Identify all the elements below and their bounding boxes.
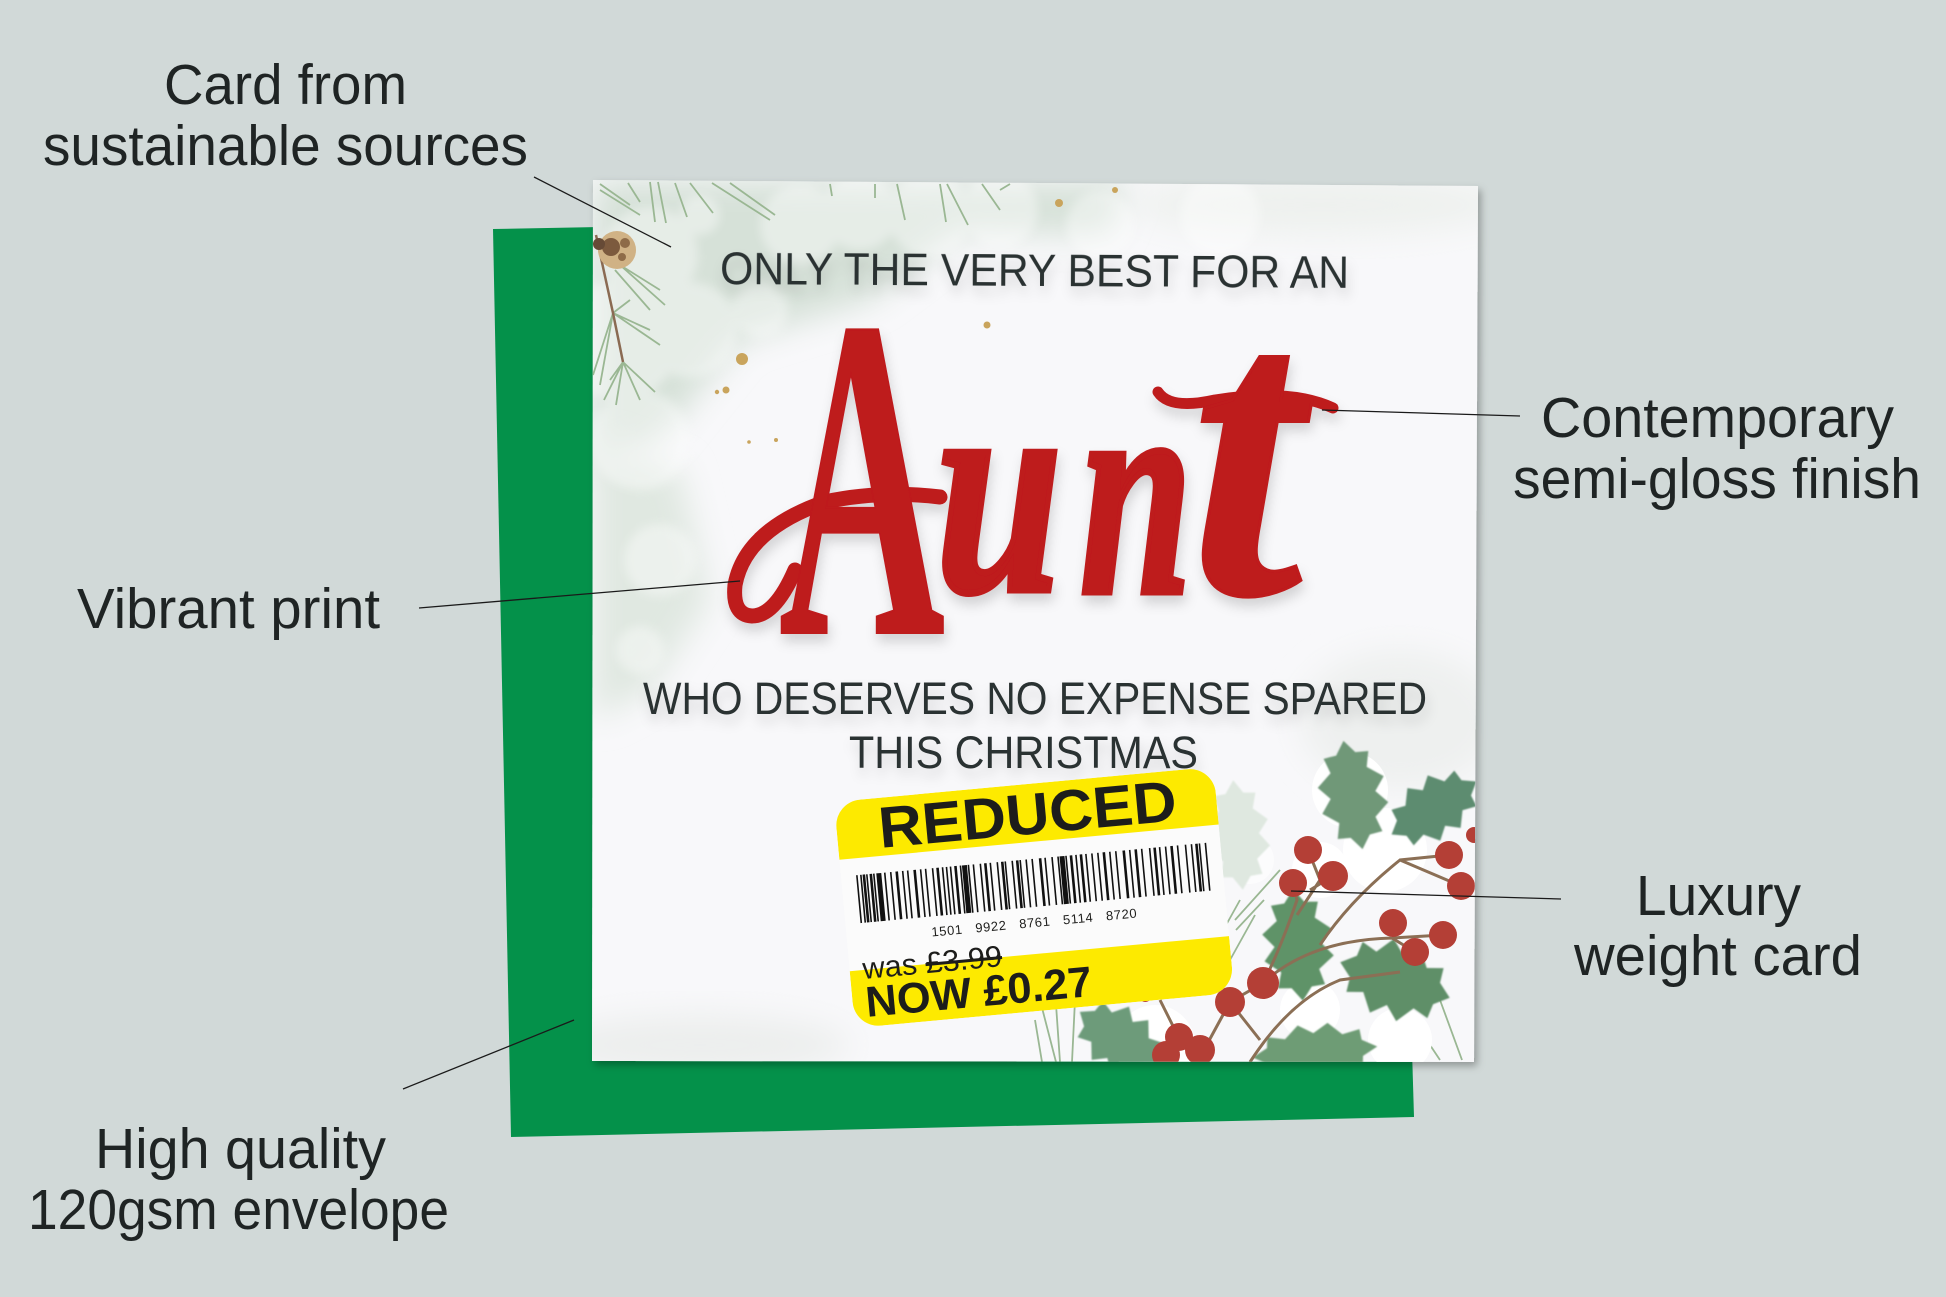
label: luxury weight card: Luxury <box>1636 864 1801 928</box>
card greeting: lower lines <box>643 673 1427 778</box>
label: sustainable sources: sustainable sources <box>43 114 528 178</box>
new price: NOW £0.27 <box>863 958 1094 1027</box>
pine cone and branch <box>593 231 636 362</box>
label: sustainable sources <box>43 53 528 178</box>
word: Aunt: t <box>1190 219 1316 684</box>
label: semi-gloss finish: semi-gloss finish <box>1513 447 1921 511</box>
card watercolour artwork <box>592 180 1478 1062</box>
envelope <box>493 227 1414 1137</box>
gold specks <box>715 187 1118 444</box>
barcode <box>857 843 1210 923</box>
white cloud behind holly <box>1115 752 1432 1085</box>
leader line: vibrant print <box>419 581 740 608</box>
leader line: sustainable sources <box>534 177 671 247</box>
label: envelope <box>28 1117 449 1242</box>
pine needles <box>593 182 1462 1062</box>
card greeting: lower lines: THIS CHRISTMAS <box>849 727 1198 778</box>
old price: was £3.99 <box>860 940 1004 986</box>
holly stems <box>1160 850 1461 1062</box>
word: Aunt: n <box>1080 325 1192 657</box>
label: semi-gloss finish <box>1513 386 1921 511</box>
card greeting: lower lines: WHO DESERVES NO EXPENSE SPARED <box>643 673 1427 724</box>
label: vibrant print: Vibrant print <box>77 577 380 641</box>
label: luxury weight card <box>1573 864 1862 988</box>
flourish: crossbar stroke beside the t <box>1158 392 1333 408</box>
label: semi-gloss finish: Contemporary <box>1541 386 1894 450</box>
holly leaves <box>1077 740 1476 1062</box>
label: sustainable sources: Card from <box>164 53 407 117</box>
word: Aunt: A <box>779 223 945 733</box>
greeting card <box>592 180 1486 1070</box>
leader line: envelope <box>403 1020 574 1089</box>
flourish: swash beside the A <box>735 494 940 616</box>
leader line: luxury weight card <box>1291 891 1561 899</box>
label: envelope: High quality <box>95 1117 386 1181</box>
label: envelope: 120gsm envelope <box>28 1178 449 1242</box>
card name: Aunt with decorative flourishes <box>735 219 1333 733</box>
word: Aunt: u <box>936 323 1062 655</box>
reduced price sticker <box>834 765 1234 1028</box>
card greeting: top line: ONLY THE VERY BEST FOR AN <box>720 243 1349 298</box>
red berries <box>1138 827 1482 1069</box>
label: luxury weight card: weight card <box>1573 924 1862 988</box>
leader line: semi-gloss finish <box>1322 410 1520 416</box>
barcode digits: 1501 9922 8761 5114 8720 <box>931 906 1137 940</box>
sticker heading: REDUCED <box>876 769 1179 861</box>
